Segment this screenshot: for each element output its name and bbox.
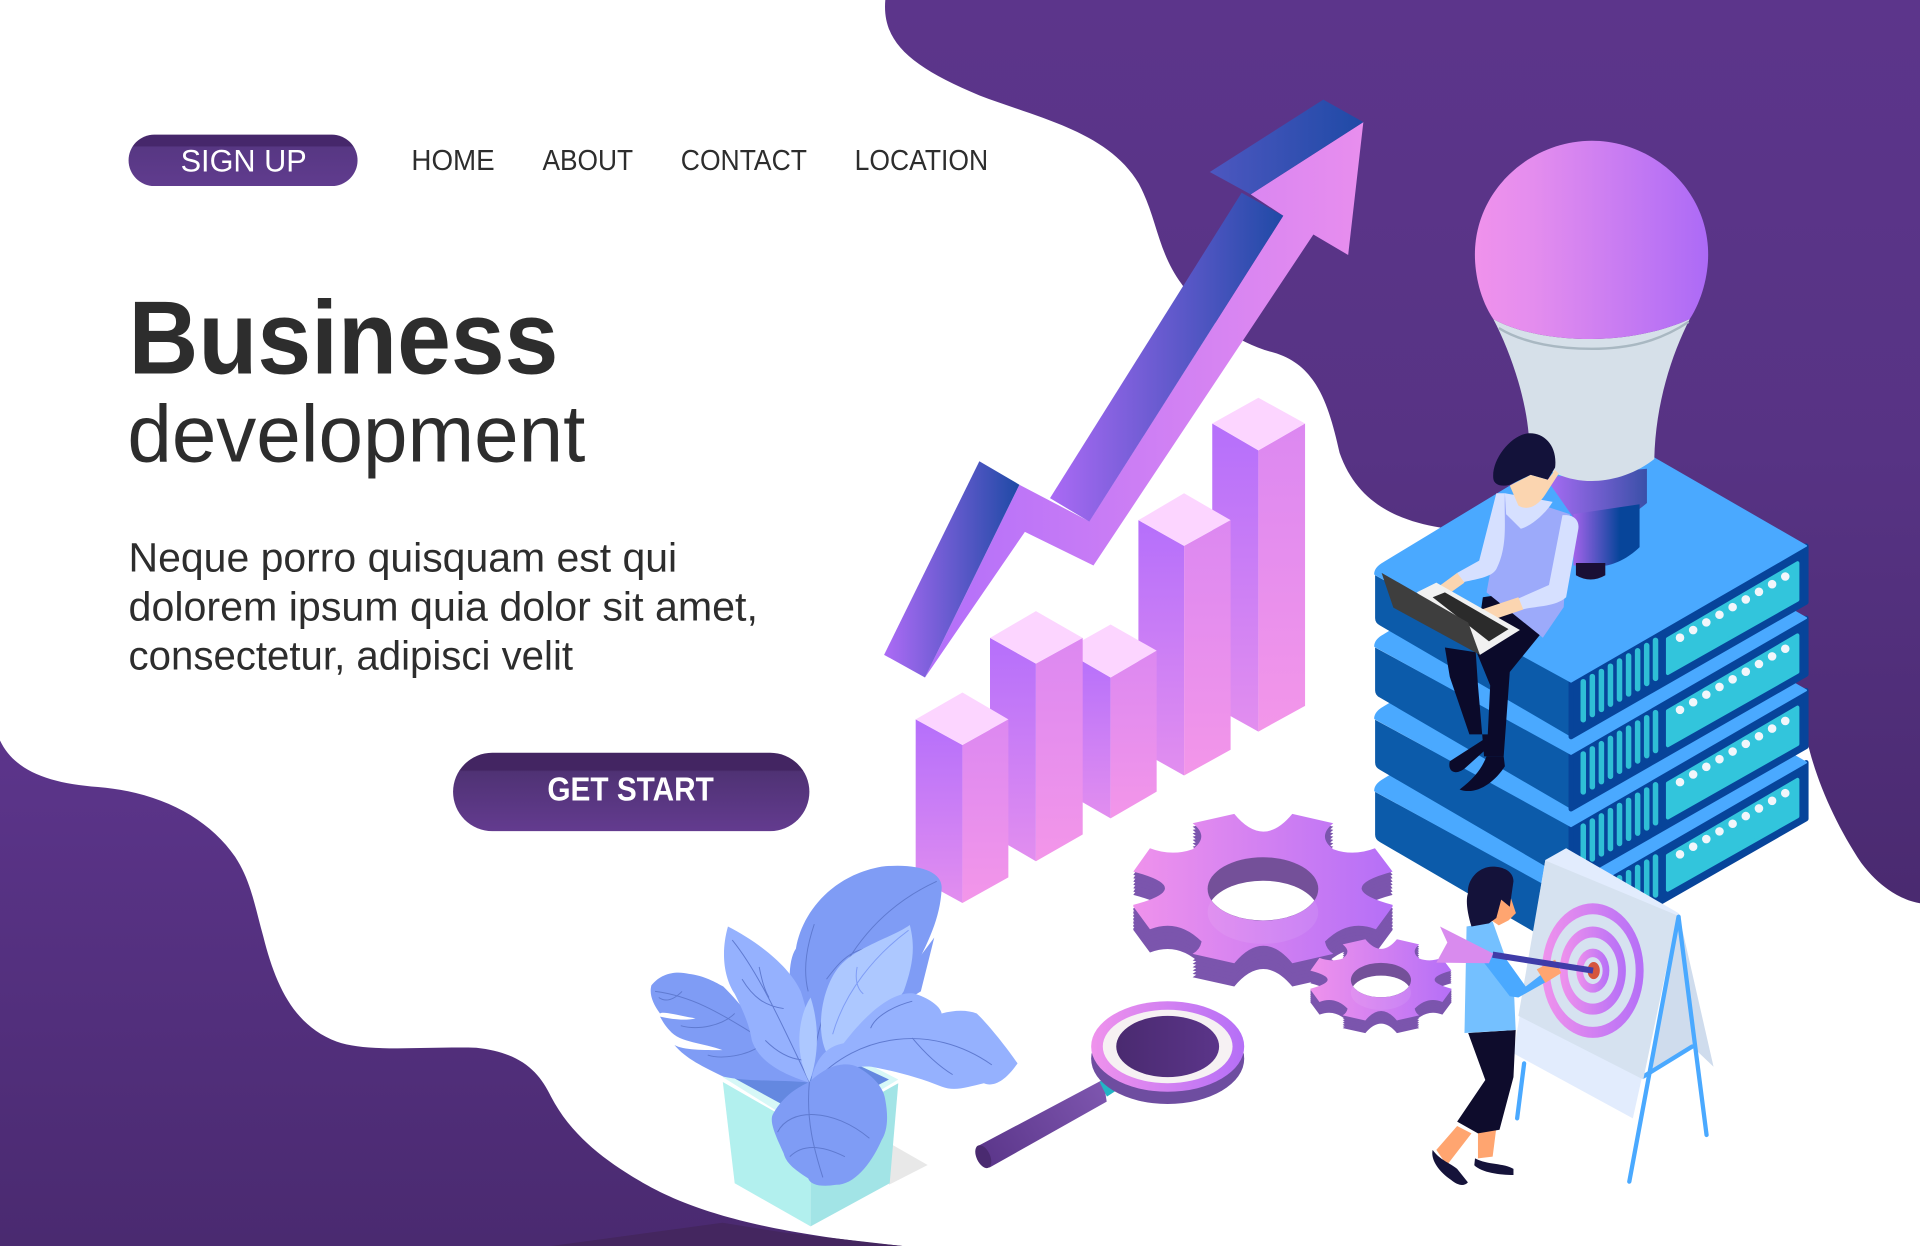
back sheet: [1647, 913, 1714, 1077]
button: get start: GET START: [547, 771, 714, 808]
woman: trousers: [1457, 1030, 1516, 1133]
magnifying glass: [972, 1001, 1244, 1171]
navigation menu: HOME: [411, 145, 495, 177]
back leaf: [790, 866, 942, 1077]
navigation menu: LOCATION: [855, 145, 988, 177]
button: sign up: [129, 135, 358, 186]
man: face: [1510, 470, 1559, 508]
man: hands: [1424, 573, 1523, 619]
leaf left upright: [724, 927, 812, 1083]
man: hair: [1493, 433, 1555, 486]
woman: arm: [1482, 952, 1547, 998]
woman: hand: [1537, 960, 1561, 983]
bar 5: [1212, 398, 1305, 732]
back easel leg: [1517, 1063, 1524, 1118]
bar 4: [1138, 493, 1231, 776]
leaf centre light: [821, 925, 913, 1053]
navigation menu: ABOUT: [542, 145, 633, 177]
bar 3: [1064, 624, 1157, 818]
pot shadow: [889, 1145, 928, 1185]
leaf front: [772, 1064, 887, 1186]
woman: shoes: [1432, 1150, 1513, 1185]
woman: hair: [1467, 867, 1513, 927]
handle: [972, 1075, 1118, 1171]
server stack: [1375, 430, 1806, 953]
man: vest: [1487, 493, 1570, 638]
woman: face: [1491, 898, 1516, 925]
woman: shirt: [1464, 922, 1516, 1033]
potted plant: [651, 866, 1018, 1226]
bar 1: [916, 693, 1008, 903]
man: sleeves: [1457, 493, 1579, 610]
body text: consectetur, adipisci velit: [129, 633, 573, 679]
background blob: top right: [885, 0, 1920, 903]
body text: [129, 535, 758, 679]
woman: legs: [1436, 1126, 1496, 1165]
target board on easel: [1513, 848, 1714, 1182]
light bulb: [1475, 141, 1708, 580]
bullseye target: [1542, 903, 1644, 1038]
paper sheet: [1513, 848, 1679, 1118]
bar chart: [916, 398, 1305, 903]
title: development: [127, 389, 585, 479]
button: get start: [453, 753, 809, 831]
man with laptop: [1382, 433, 1579, 791]
pot: [723, 1034, 898, 1226]
large gear: [1133, 814, 1393, 987]
easel supports: [1643, 917, 1707, 1135]
lens: [1091, 1001, 1244, 1104]
button: sign up: SIGN UP: [181, 143, 307, 178]
background blob: bottom left: [0, 741, 902, 1246]
title: [127, 280, 585, 479]
leaf left lower: [651, 973, 809, 1083]
title: Business: [129, 280, 558, 396]
leaf right: [811, 993, 1018, 1089]
dart arrow: [1436, 927, 1593, 971]
small gear: [1310, 939, 1451, 1033]
leaf centre stem: [799, 998, 817, 1082]
man: boots: [1449, 737, 1505, 791]
growth arrow: [884, 100, 1363, 677]
man: collar: [1505, 493, 1553, 529]
body text: Neque porro quisquam est qui: [129, 535, 677, 581]
navigation menu: [411, 145, 988, 177]
man: legs: [1445, 595, 1542, 756]
laptop: [1382, 573, 1520, 655]
bar 2: [990, 611, 1083, 861]
gears: [1133, 814, 1451, 1033]
body text: dolorem ipsum quia dolor sit amet,: [129, 584, 758, 630]
front easel leg: [1629, 917, 1679, 1182]
navigation menu: CONTACT: [681, 145, 807, 177]
woman aiming arrow: [1432, 867, 1593, 1185]
